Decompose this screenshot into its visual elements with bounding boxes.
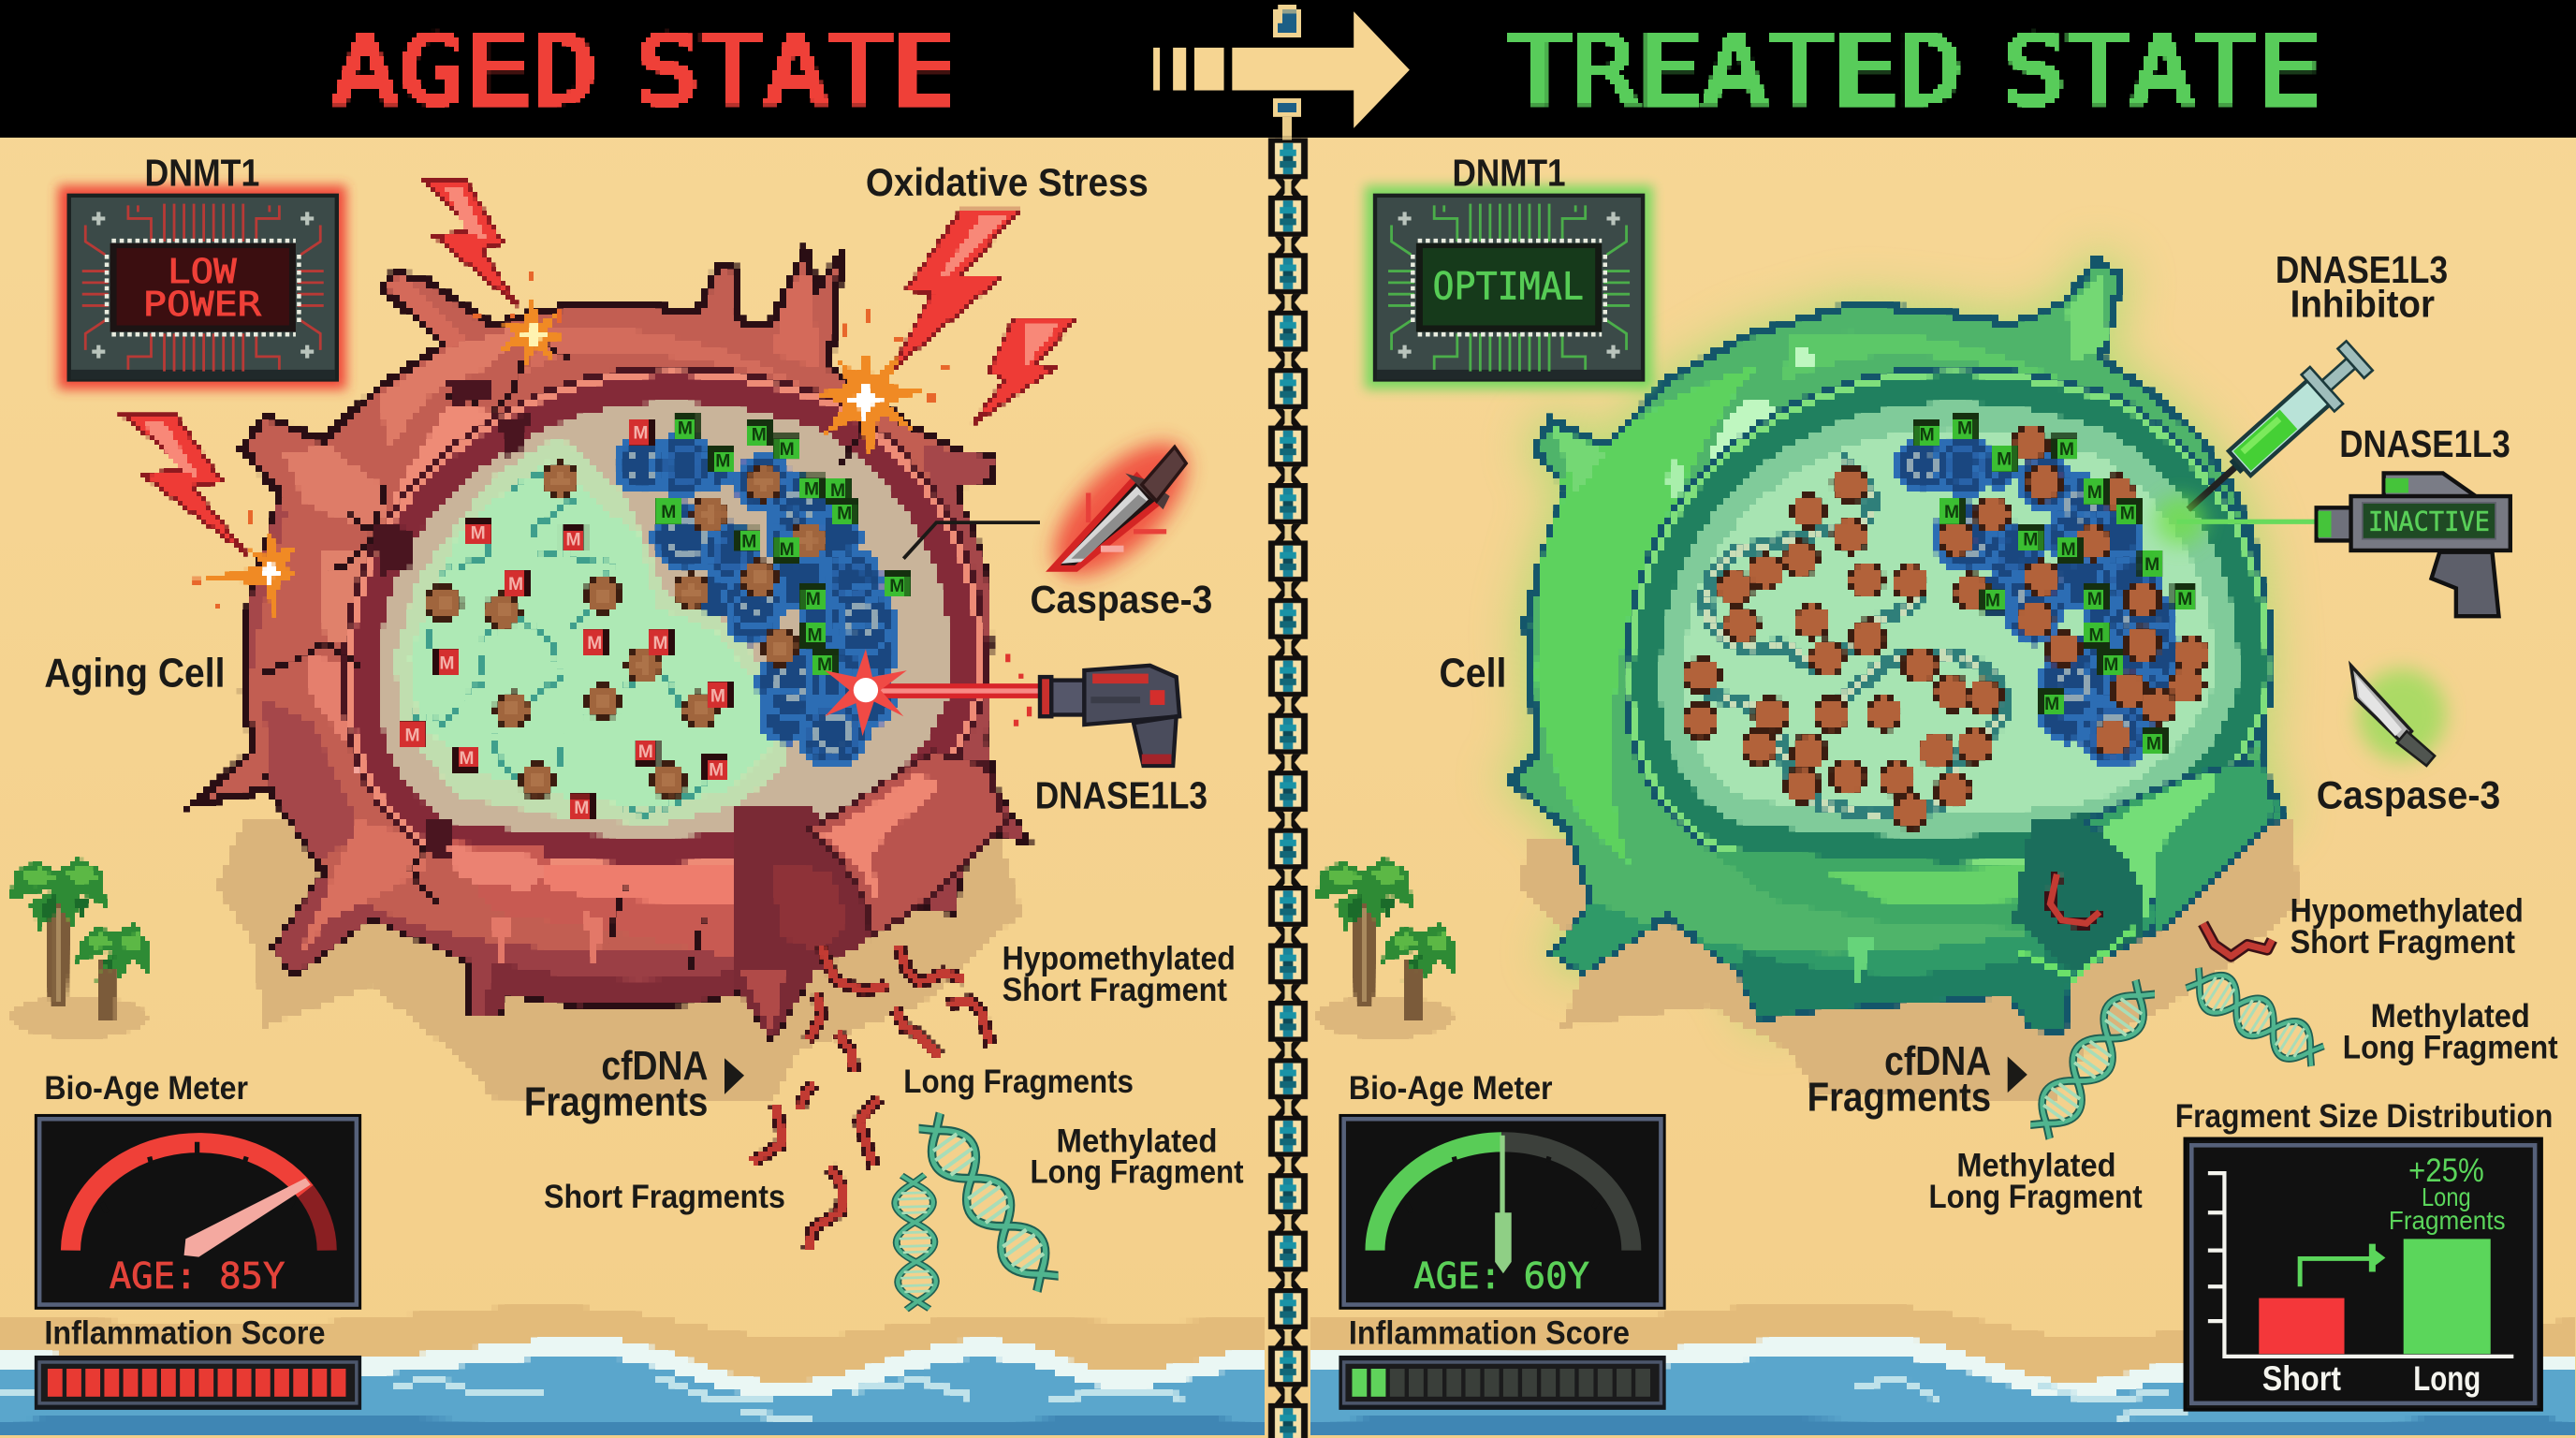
needle (184, 1178, 311, 1257)
methyl tags (1927, 427, 2185, 742)
panel: fragment size distribution chart (2185, 1138, 2541, 1410)
bottom wall panel (1708, 849, 2037, 986)
inner wall band (1660, 403, 2238, 836)
icon: inactive DNASE1L3 gun with green beam (2156, 473, 2510, 616)
chain links on header (1273, 4, 1303, 138)
icon: caspase-3 active knife (1032, 421, 1208, 597)
bars (2259, 1239, 2491, 1354)
panel: aged inflammation bar (35, 1356, 361, 1410)
labels: treated state: Inflammation Score (1349, 1315, 1630, 1352)
labels: aged state: cfDNA (601, 1043, 708, 1089)
labels: aged state: Aging Cell (44, 651, 225, 697)
labels: aged state: DNASE1L3 (1035, 774, 1208, 817)
title: aged state (332, 17, 956, 127)
beach and ocean shoreline (0, 1303, 2576, 1438)
red fragment in fold (2050, 874, 2100, 923)
axes (2208, 1173, 2513, 1357)
icons: aged methylated long fragments (894, 1108, 1065, 1310)
panel: treated bio-age meter: AGE: 60Y (1413, 1255, 1589, 1298)
labels: treated state: Inhibitor (2291, 283, 2435, 326)
icon: caspase-3 inactive knife (2351, 666, 2446, 766)
labels: treated state: Short Fragment (2291, 924, 2515, 961)
labels: aged state: Fragments (524, 1079, 708, 1125)
labels: treated state: Cell (1439, 651, 1506, 697)
chromatin coil (613, 433, 900, 769)
lightning bolts (124, 179, 1076, 553)
labels: aged state: Short Fragment (1003, 972, 1227, 1008)
labels: aged state: Hypomethylated (1003, 941, 1236, 977)
icon: treated DNMT1 chip: OPTIMAL (1432, 264, 1584, 308)
methylated long fragment 2 (2182, 961, 2328, 1073)
short red fragments (753, 946, 990, 1249)
gun (1040, 666, 1179, 766)
labels: treated state (1349, 151, 2558, 1352)
icons: aged cfDNA fragments (753, 946, 990, 1249)
cell body (198, 250, 1051, 1051)
panel: fragment size distribution chart: Fragments (2389, 1206, 2506, 1235)
arrow: aged to treated (1153, 11, 1410, 128)
spark bursts (194, 271, 948, 618)
fold pocket (2012, 814, 2145, 977)
cell body (1507, 256, 2287, 1035)
cell shadow (1519, 822, 2300, 1101)
methylated long fragment (2025, 976, 2161, 1143)
panel: fragment size distribution chart: Long (2422, 1182, 2471, 1211)
chromatin coil (1895, 433, 2182, 769)
title: treated state (1506, 17, 2321, 127)
cavity (378, 403, 950, 836)
labels: treated state: Methylated (1956, 1148, 2116, 1184)
arrow: pointer line to caspase (903, 522, 1040, 559)
gauge (70, 1142, 327, 1251)
inner wall band (378, 403, 950, 836)
panel: fragment size distribution chart: Short (2262, 1359, 2341, 1398)
panel: aged bio-age meter (37, 1116, 359, 1308)
right wall panel (809, 753, 1005, 936)
methyl letters in aged nucleus (404, 418, 904, 818)
palms right (1314, 858, 1454, 1038)
labels: treated state: Caspase-3 (2317, 773, 2500, 817)
labels: aged state: Long Fragment (1030, 1154, 1244, 1191)
methyl letters in treated nucleus: MMMMMMMMMMMMMMMMM (1920, 418, 2192, 754)
methyl letters in aged nucleus: MMMMMMMMMMMMM (404, 424, 725, 818)
title: aged state: STATE (636, 17, 956, 127)
chain divider (1266, 138, 1310, 1438)
labels: aged state (44, 151, 1244, 1352)
labels: aged state: Methylated (1057, 1123, 1218, 1159)
panel: treated cell (1479, 259, 2333, 1101)
DNA strands with nucleosomes (1701, 460, 2004, 814)
panel: treated inflammation bar (1339, 1356, 1666, 1410)
labels: treated state: Hypomethylated (2291, 893, 2524, 930)
wall cracks (263, 337, 862, 970)
icon: treated DNMT1 chip (1365, 185, 1653, 389)
red fragment in pocket highlight (2050, 874, 2100, 923)
title: aged state: AGED (332, 17, 598, 127)
labels: aged state: Inflammation Score (44, 1315, 326, 1352)
torn fold (731, 805, 874, 1038)
title: treated state: TREATED (1506, 17, 1963, 127)
DNA strands (409, 472, 707, 815)
panel: treated bio-age meter (1340, 1116, 1664, 1308)
nucleus interior (394, 435, 788, 825)
bottom wall panel (444, 842, 755, 970)
labels: treated state: Long Fragment (1928, 1179, 2143, 1215)
icons: aged oxidative bolts and sparks (124, 179, 1076, 618)
labels: treated state: DNMT1 (1453, 151, 1566, 194)
icon: active DNASE1L3 laser gun with beam (825, 649, 1179, 766)
labels: aged state: Long Fragments (903, 1064, 1134, 1100)
labels: treated state: Long Fragment (2343, 1029, 2558, 1065)
cavity (1660, 403, 2238, 836)
inactive beam (2156, 496, 2315, 546)
labels: aged state: Bio-Age Meter (44, 1070, 248, 1107)
growth arrow (2300, 1244, 2385, 1286)
icon: aged DNMT1 chip (58, 185, 346, 389)
labels: treated state: Methylated (2371, 998, 2530, 1034)
laser beam (825, 649, 1042, 736)
labels: aged state: Caspase-3 (1030, 578, 1212, 622)
nucleus interior (1684, 430, 2215, 814)
icon: aged DNMT1 chip: LOW (168, 253, 237, 291)
nucleosomes (444, 479, 809, 781)
methyl tags (413, 427, 897, 807)
palms left (8, 858, 148, 1038)
panel: aged bio-age meter: AGE: 85Y (110, 1255, 285, 1298)
labels: aged state: Short Fragments (544, 1179, 785, 1215)
icon: inhibitor syringe (2172, 337, 2376, 528)
labels: aged state: DNMT1 (144, 151, 259, 194)
icon: inactive DNASE1L3 gun with green beam: INACTIVE (2368, 506, 2490, 537)
icons: treated cfDNA fragments (2025, 923, 2328, 1143)
cell shadow (217, 822, 1022, 1101)
title: treated state: STATE (2002, 17, 2321, 127)
panel: fragment size distribution chart: Long (2413, 1359, 2481, 1398)
icon: aged DNMT1 chip: POWER (143, 286, 261, 324)
hypomethylated short fragment (2203, 923, 2272, 956)
panel: aged cell (198, 250, 1051, 1101)
gun body (2317, 473, 2510, 616)
gauge (1375, 1142, 1632, 1251)
labels: treated state: DNASE1L3 (2339, 422, 2510, 465)
labels: treated state: Bio-Age Meter (1349, 1070, 1553, 1107)
methyl letters in aged nucleus: MMMMMMMMMMMMMM (661, 418, 904, 675)
header bar (0, 0, 2576, 138)
labels: treated state: cfDNA (1884, 1038, 1991, 1084)
needle (1495, 1136, 1512, 1273)
panel: fragment size distribution chart: +25% (2408, 1152, 2484, 1189)
labels: treated state: Fragments (1808, 1074, 1991, 1120)
nucleosomes (1701, 444, 2191, 812)
labels: aged state: Oxidative Stress (866, 160, 1149, 204)
labels: treated state: DNASE1L3 (2276, 248, 2448, 291)
right wall panel (2086, 759, 2276, 936)
